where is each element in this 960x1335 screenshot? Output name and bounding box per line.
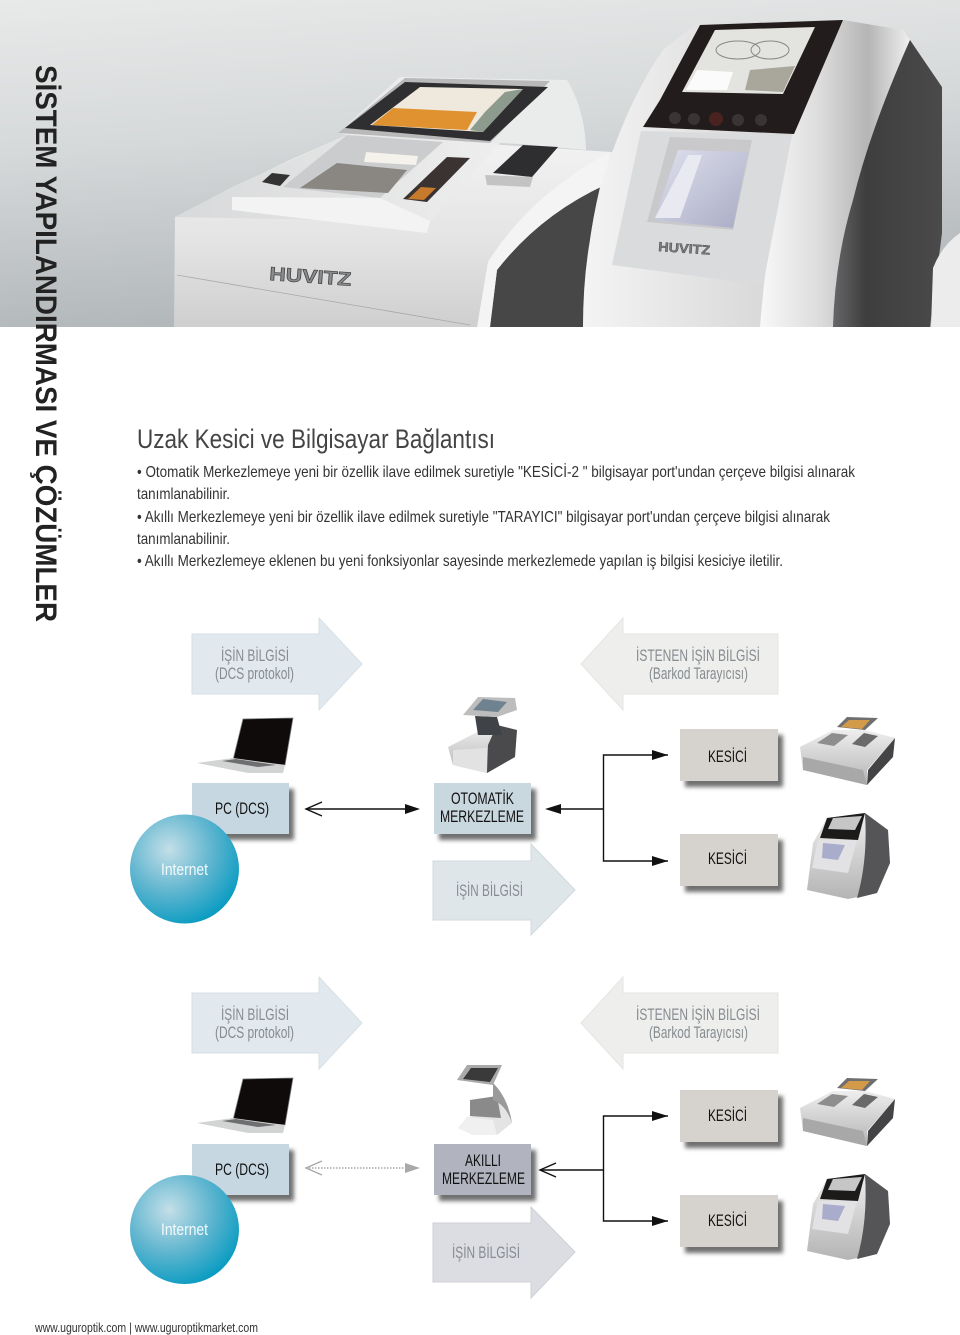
arrow: job info from centering: İŞİN BİLGİSİ bbox=[456, 881, 523, 900]
body text: tanımlanabilinir. bbox=[137, 531, 230, 548]
box: edger 1: KESİCİ bbox=[708, 1106, 747, 1125]
arrow: job info from centering bbox=[433, 844, 575, 935]
box: PC (DCS) bbox=[192, 783, 294, 840]
box: smart centering: MERKEZLEME bbox=[442, 1169, 525, 1188]
arrow: job info (DCS) bbox=[192, 618, 362, 710]
arrow: job info (DCS): İŞİN BİLGİSİ bbox=[221, 646, 289, 665]
box: PC (DCS) bbox=[192, 1144, 294, 1201]
heading: Uzak Kesici ve Bilgisayar Bağlantısı bbox=[137, 424, 495, 454]
hero background bbox=[0, 0, 960, 327]
arrow: requested job info (barcode) bbox=[581, 618, 778, 710]
circle: Internet: Internet bbox=[161, 860, 208, 879]
circle: Internet: Internet bbox=[161, 1220, 208, 1239]
connector arrows: centering to edgers bbox=[545, 750, 668, 866]
icon: edger device 2 bbox=[807, 1174, 890, 1260]
icon: laptop bbox=[197, 1078, 293, 1133]
hero photo: lens edgers bbox=[0, 0, 960, 327]
box: PC (DCS): PC (DCS) bbox=[215, 1160, 269, 1179]
arrow: job info (DCS): (DCS protokol) bbox=[215, 664, 294, 683]
box: edger 1: KESİCİ bbox=[708, 747, 747, 766]
arrow: requested job info (barcode): İSTENEN İŞİN BİLGİSİ bbox=[636, 1005, 760, 1024]
logo: HUVITZ: HUVITZ bbox=[269, 264, 352, 291]
arrow: PC to centering, two-way bbox=[306, 802, 420, 816]
circle: Internet bbox=[130, 814, 239, 924]
logo: HUVITZ: HUVITZ bbox=[658, 239, 711, 258]
arrow: requested job info (barcode) bbox=[581, 977, 778, 1069]
diagram 2: smart centering bbox=[130, 977, 895, 1298]
hero machine: left edger bbox=[174, 77, 612, 327]
box: smart centering: AKILLI bbox=[465, 1151, 501, 1170]
box: edger 2: KESİCİ bbox=[708, 849, 747, 868]
arrow: PC to centering, dotted bbox=[306, 1161, 420, 1175]
arrow: requested job info (barcode): İSTENEN İŞİN BİLGİSİ bbox=[636, 646, 760, 665]
connector arrows: centering to edgers bbox=[540, 1111, 668, 1226]
icon: edger device 2 bbox=[807, 813, 890, 899]
body text: • Akıllı Merkezlemeye yeni bir özellik ilave edilmek suretiyle "TARAYICI" bilgisayar port'undan çerçeve bilgisi alınarak bbox=[137, 509, 831, 526]
icon: laptop bbox=[197, 718, 293, 773]
arrow: job info (DCS) bbox=[192, 977, 362, 1069]
box: edger 2: KESİCİ bbox=[708, 1211, 747, 1230]
arrow: job info (DCS): İŞİN BİLGİSİ bbox=[221, 1005, 289, 1024]
box: smart centering bbox=[434, 1144, 536, 1201]
box: automatic centering bbox=[434, 783, 536, 840]
diagram 1: automatic centering bbox=[130, 618, 895, 935]
vertical page title: SİSTEM YAPILANDIRMASI VE ÇÖZÜMLER bbox=[29, 65, 62, 622]
hero machine: partial third device bbox=[931, 233, 960, 327]
arrow: requested job info (barcode): (Barkod Tarayıcısı) bbox=[649, 1023, 748, 1042]
box: edger 1 bbox=[680, 729, 783, 787]
box: PC (DCS): PC (DCS) bbox=[215, 799, 269, 818]
icon: edger device 1 bbox=[800, 717, 895, 785]
icon: smart centering device bbox=[457, 1065, 512, 1135]
arrow: requested job info (barcode): (Barkod Tarayıcısı) bbox=[649, 664, 748, 683]
hero machine: right edger bbox=[583, 20, 942, 327]
box: edger 1 bbox=[680, 1090, 783, 1148]
body text: • Akıllı Merkezlemeye eklenen bu yeni fonksiyonlar sayesinde merkezlemede yapılan iş bilgisi kesiciye iletilir. bbox=[137, 553, 783, 570]
body text bbox=[137, 462, 856, 570]
box: automatic centering: OTOMATİK bbox=[451, 789, 514, 808]
arrow: job info from centering: İŞİN BİLGİSİ bbox=[452, 1243, 520, 1262]
arrow: job info (DCS): (DCS protokol) bbox=[215, 1023, 294, 1042]
body text: tanımlanabilinir. bbox=[137, 486, 230, 503]
arrow: job info from centering bbox=[433, 1207, 575, 1298]
box: edger 2 bbox=[680, 834, 783, 892]
circle: Internet bbox=[130, 1175, 239, 1284]
icon: automatic centering device bbox=[448, 697, 517, 773]
footer website links: www.uguroptik.com | www.uguroptikmarket.com bbox=[34, 1321, 258, 1335]
icon: edger device 1 bbox=[800, 1078, 895, 1146]
box: edger 2 bbox=[680, 1195, 783, 1253]
box: automatic centering: MERKEZLEME bbox=[440, 807, 524, 826]
